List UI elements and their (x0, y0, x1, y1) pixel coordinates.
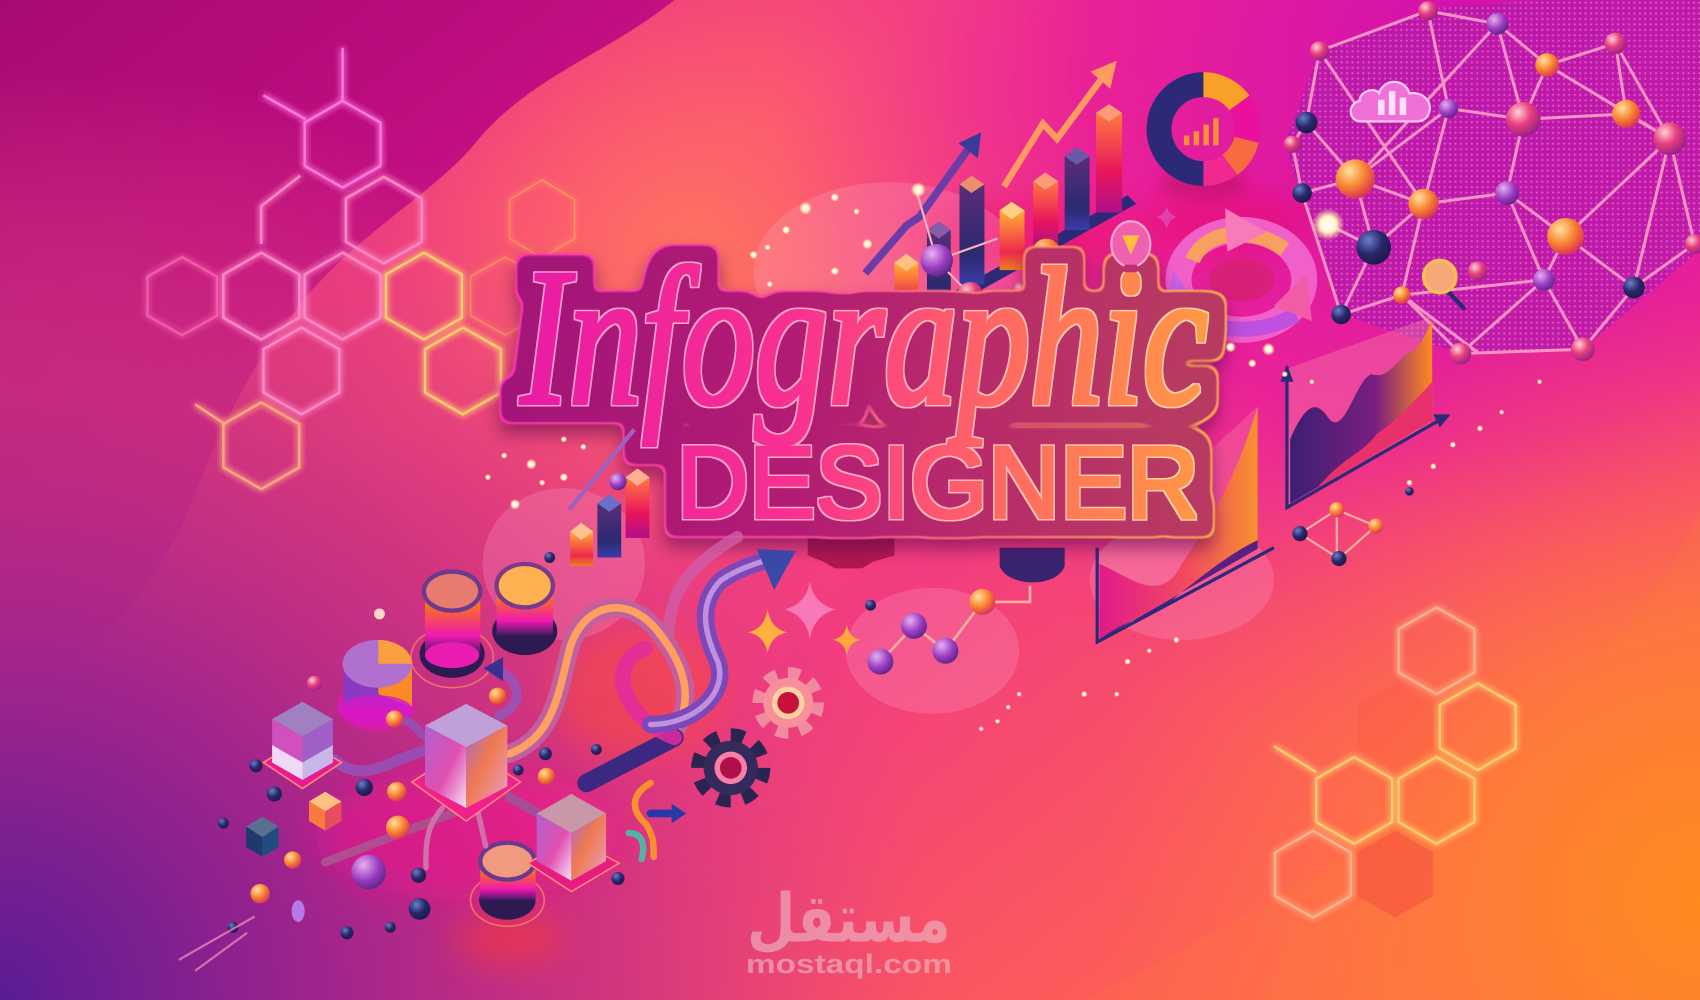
comet streaks (179, 916, 255, 971)
network mesh (1284, 0, 1700, 364)
tube arrow head (757, 549, 796, 590)
molecule right (1292, 502, 1383, 566)
watermark: مستقل (747, 879, 951, 957)
title: DESIGNER (677, 425, 1199, 539)
icon: cloud (1351, 82, 1430, 121)
area chart right (1280, 317, 1451, 508)
icon: light bulb (1111, 221, 1150, 272)
small curved arrows (629, 783, 685, 859)
network nodes (1284, 1, 1700, 364)
bar chart with arrows (865, 61, 1136, 323)
glass tubes (510, 537, 772, 783)
icon: magnifier (1424, 260, 1464, 308)
arrow navy (865, 132, 981, 273)
cube right (528, 794, 619, 892)
light translucent blobs behind charts (482, 182, 1274, 714)
gear navy (698, 735, 763, 800)
molecule centre (867, 586, 1030, 675)
cylinder 1 (411, 572, 493, 688)
donut chart (1141, 67, 1266, 196)
small bars (569, 430, 649, 566)
pie cylinder (337, 640, 415, 731)
cube large (412, 704, 520, 821)
cube orange (309, 792, 342, 831)
cylinder 3 (471, 843, 544, 926)
title: Infographic (520, 227, 1208, 446)
cube left (263, 702, 342, 789)
glowing particles (485, 193, 1542, 732)
watermark (746, 879, 952, 979)
ring arrows (1165, 208, 1312, 330)
arrow orange (1004, 61, 1117, 187)
area chart left (1097, 407, 1274, 642)
chart nodes (911, 182, 1060, 308)
cylinders (337, 564, 557, 926)
neon hexagons top left (147, 48, 575, 489)
pie piece behind title (1000, 548, 1065, 582)
cylinder 2 (492, 564, 557, 655)
mini bars (1184, 118, 1219, 145)
cube blue (246, 817, 279, 857)
connector tracks (325, 657, 542, 868)
gear behind title (808, 537, 894, 568)
sparkles (748, 206, 1177, 655)
gear pink (759, 674, 817, 732)
title (520, 227, 1208, 539)
neon hexagons bottom right (1274, 607, 1516, 918)
bars (894, 104, 1122, 317)
spark (1312, 208, 1344, 241)
beads scattered (218, 487, 1414, 939)
watermark: mostaql.com (746, 948, 952, 979)
